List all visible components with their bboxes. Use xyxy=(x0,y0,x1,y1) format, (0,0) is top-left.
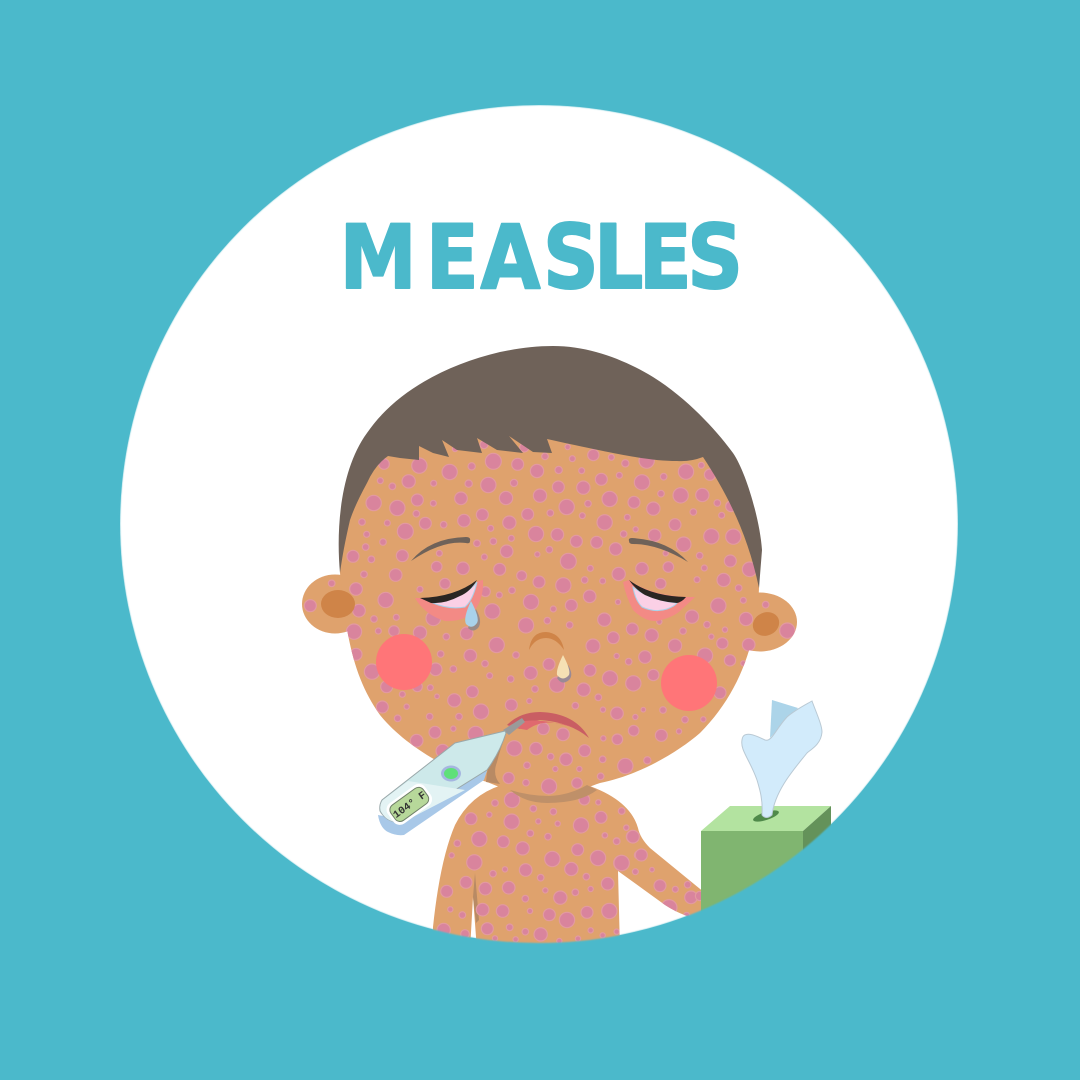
neck shadow xyxy=(510,785,597,803)
ear inner: left xyxy=(321,590,355,618)
tissue box xyxy=(701,700,831,941)
measles spots xyxy=(304,441,795,944)
hair xyxy=(339,346,762,588)
opening xyxy=(752,808,780,824)
eyeball xyxy=(633,587,677,611)
box side xyxy=(803,806,831,905)
thermometer xyxy=(378,718,525,835)
tear shadow xyxy=(468,609,480,630)
ear: right xyxy=(723,592,797,652)
underside xyxy=(378,768,488,835)
probe tip xyxy=(503,718,525,735)
spots: right face xyxy=(517,444,795,681)
front tissue xyxy=(742,701,822,818)
button xyxy=(444,768,458,779)
illustration: sick boy xyxy=(302,346,797,950)
highlight band xyxy=(380,781,465,822)
panel: white circle xyxy=(120,105,958,943)
eyebrow: right xyxy=(629,538,688,562)
casing xyxy=(380,731,506,822)
eyeball xyxy=(433,582,477,608)
back tissue xyxy=(770,700,798,738)
eye: left xyxy=(415,580,483,621)
inner lip xyxy=(508,720,575,730)
cheek: right xyxy=(661,655,717,711)
title: MEASLES xyxy=(340,206,743,309)
nasal drip xyxy=(557,655,569,678)
eye: right xyxy=(623,580,695,621)
arm shadow xyxy=(473,873,479,923)
nasal drip shadow xyxy=(557,665,571,683)
eyelid xyxy=(629,580,686,603)
eyelid xyxy=(420,580,477,603)
head xyxy=(340,400,759,797)
display halo xyxy=(383,781,435,828)
lower lid xyxy=(415,580,483,621)
infographic scene xyxy=(120,105,958,944)
reading: 104° F xyxy=(391,790,429,822)
display xyxy=(388,785,431,824)
spots: lower right cheek and arm xyxy=(602,687,726,918)
cheek: left xyxy=(376,634,432,690)
ear inner: right xyxy=(749,608,783,640)
mouth xyxy=(507,712,589,738)
spots: upper left face xyxy=(304,441,529,640)
lower lid xyxy=(623,580,695,621)
torso and arms xyxy=(433,785,705,950)
nose xyxy=(529,632,564,650)
box front xyxy=(701,831,803,941)
spots: lower face and torso xyxy=(350,637,642,944)
tear xyxy=(465,601,478,627)
ear: left xyxy=(302,574,368,634)
box top xyxy=(701,806,831,831)
eyebrow: left xyxy=(411,537,470,561)
button ring xyxy=(441,766,461,782)
thermometer shadow on face xyxy=(486,737,505,784)
lower lip xyxy=(507,712,589,738)
